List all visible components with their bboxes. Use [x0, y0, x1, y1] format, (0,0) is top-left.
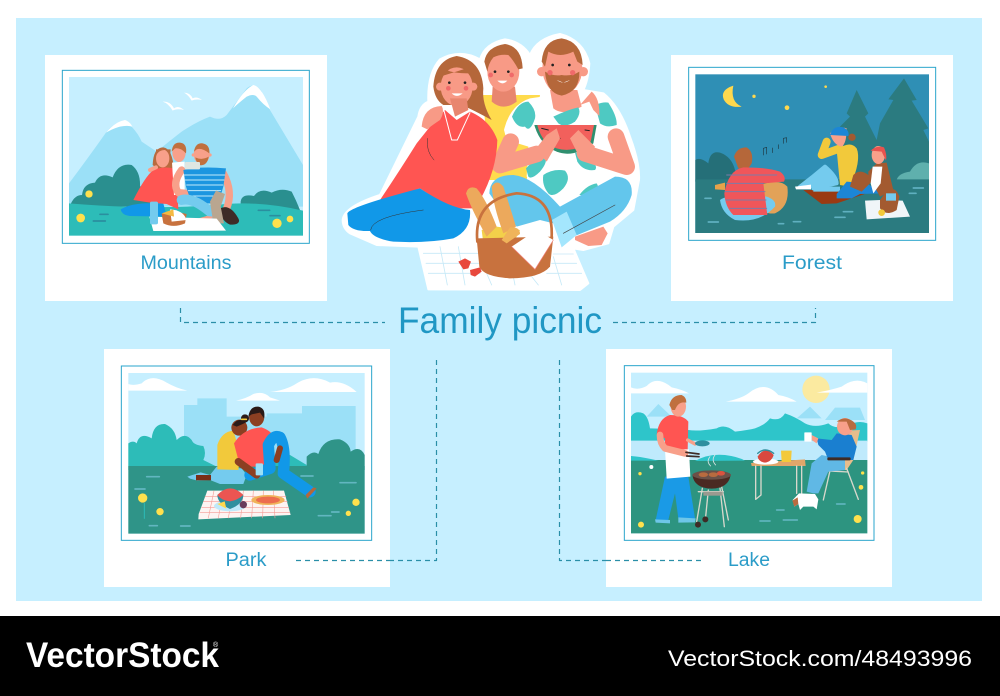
panel: park: [104, 349, 390, 587]
watermark url: VectorStock.com/48493996: [668, 646, 972, 671]
connector overlay: lake: [606, 560, 701, 562]
panel: forest: [671, 55, 953, 301]
blanket with food: [198, 488, 291, 519]
illustration: forest scene: [689, 67, 936, 240]
woman in chair: [804, 418, 860, 500]
grill: [692, 455, 731, 528]
footer bar: [0, 616, 1000, 696]
mat: [803, 190, 877, 204]
teen in yellow: [795, 127, 858, 192]
connector lines: [180, 308, 816, 560]
dog: [210, 191, 239, 225]
man: [234, 407, 317, 499]
man: [489, 38, 632, 247]
sticker outline: [343, 34, 639, 290]
woman: [347, 56, 497, 242]
central illustration: family: [343, 34, 639, 290]
boy: [479, 44, 540, 180]
man: [176, 143, 229, 223]
watermark brand: VectorStock: [26, 636, 220, 675]
woman: [187, 414, 249, 484]
child: [172, 143, 186, 195]
picnic basket: [466, 182, 553, 278]
table: [751, 450, 806, 499]
guitarist: [715, 147, 788, 221]
registered mark: ®: [213, 641, 219, 649]
blanket and basket: [149, 202, 226, 231]
blanket and basket: [865, 189, 910, 219]
blanket: [420, 243, 587, 287]
teen in jacket: [837, 146, 893, 198]
man's trousers: [489, 175, 632, 247]
woman: [121, 147, 178, 217]
label: lake: Lake: [728, 550, 770, 571]
connector overlay: park: [296, 560, 390, 562]
label: park: Park: [226, 550, 267, 571]
dog: [792, 493, 818, 510]
man at the grill: [655, 395, 710, 523]
label: mountains: Mountains: [140, 253, 232, 274]
label: forest: Forest: [782, 253, 843, 274]
title: Family picnic: [398, 300, 602, 341]
illustration: lake scene: [624, 366, 874, 540]
panel: mountains: [45, 55, 327, 301]
illustration: park scene: [121, 366, 372, 540]
illustration: mountains scene: [62, 70, 309, 243]
strawberries: [458, 258, 482, 277]
panel: lake: [606, 349, 892, 587]
